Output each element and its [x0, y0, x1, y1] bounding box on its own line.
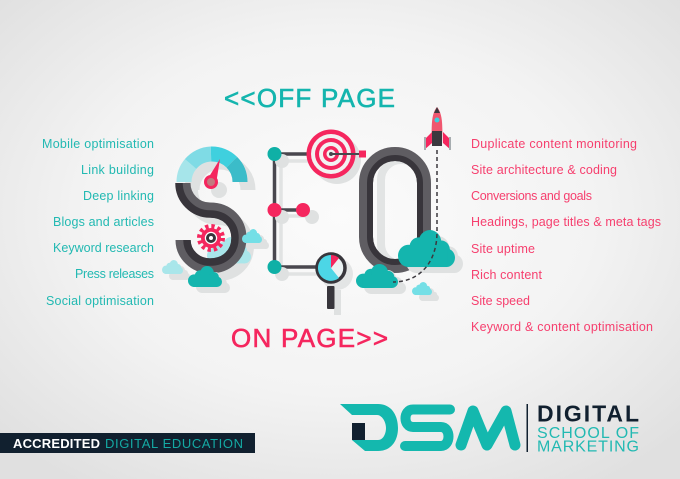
cloud: teal: [188, 266, 222, 287]
list: on page factors: Duplicate content monitoring: [471, 137, 637, 151]
letter O: [366, 154, 424, 266]
cloud shadow left: [169, 266, 190, 280]
icon: rocket: [424, 107, 451, 150]
heading: on page: ON PAGE>>: [231, 323, 388, 353]
gauge needle: [204, 159, 220, 189]
list: on page factors: Site uptime: [471, 242, 535, 256]
list: off page factors: Link building: [81, 163, 154, 177]
logo wordmark: MARKETING: [537, 438, 639, 456]
icon: target: [306, 130, 366, 184]
list: on page factors: Site architecture & coding: [471, 163, 617, 177]
cloud shadow lower: [364, 270, 406, 294]
list: off page factors: [42, 137, 154, 308]
cloud: small left: [162, 260, 183, 274]
banner: accredited digital education: DIGITAL EDUCATION: [105, 436, 243, 451]
logo wordmark: [537, 400, 639, 456]
gear: [200, 226, 222, 250]
list: on page factors: Headings, page titles & meta tags: [471, 215, 661, 229]
banner: accredited digital education: ACCREDITED: [13, 436, 100, 451]
list: off page factors: Mobile optimisation: [42, 137, 154, 151]
cloud shadow right: [249, 235, 269, 249]
banner: accredited digital education: [0, 433, 255, 453]
list: off page factors: Social optimisation: [46, 294, 154, 308]
gauge: [184, 154, 240, 182]
cloud: large teal: [398, 230, 455, 267]
list: off page factors: Deep linking: [83, 189, 154, 203]
cloud behind gear: [207, 237, 251, 263]
heading: off page: <<OFF PAGE: [224, 83, 395, 113]
list: on page factors: Keyword & content optimisation: [471, 320, 653, 334]
letter S with gauge, gear and clouds: [162, 154, 269, 293]
list: off page factors: Blogs and articles: [53, 215, 154, 229]
circuit node shadows: [275, 154, 319, 281]
list: on page factors: Conversions and goals: [471, 189, 592, 203]
logo divider: [526, 404, 528, 452]
circuit nodes: [268, 147, 310, 274]
list: on page factors: Site speed: [471, 294, 530, 308]
cloud: lower teal: [356, 264, 398, 288]
cloud shadow teal: [196, 272, 230, 293]
logo wordmark: DIGITAL: [537, 400, 639, 426]
list: off page factors: Keyword research: [53, 241, 154, 255]
logo: DSM mark: [340, 404, 515, 451]
cloud: small right: [242, 229, 262, 243]
logo wordmark: SCHOOL OF: [537, 425, 639, 442]
letter E circuit: [268, 147, 319, 281]
cloud: small light: [412, 282, 432, 295]
cloud shadow small: [419, 288, 439, 301]
cloud shadow large: [406, 236, 463, 273]
rocket flight path: [393, 150, 437, 282]
list: off page factors: Press releases: [75, 267, 154, 281]
list: on page factors: Rich content: [471, 268, 543, 282]
icon: magnifier: [317, 254, 353, 315]
list: on page factors: [471, 137, 661, 334]
